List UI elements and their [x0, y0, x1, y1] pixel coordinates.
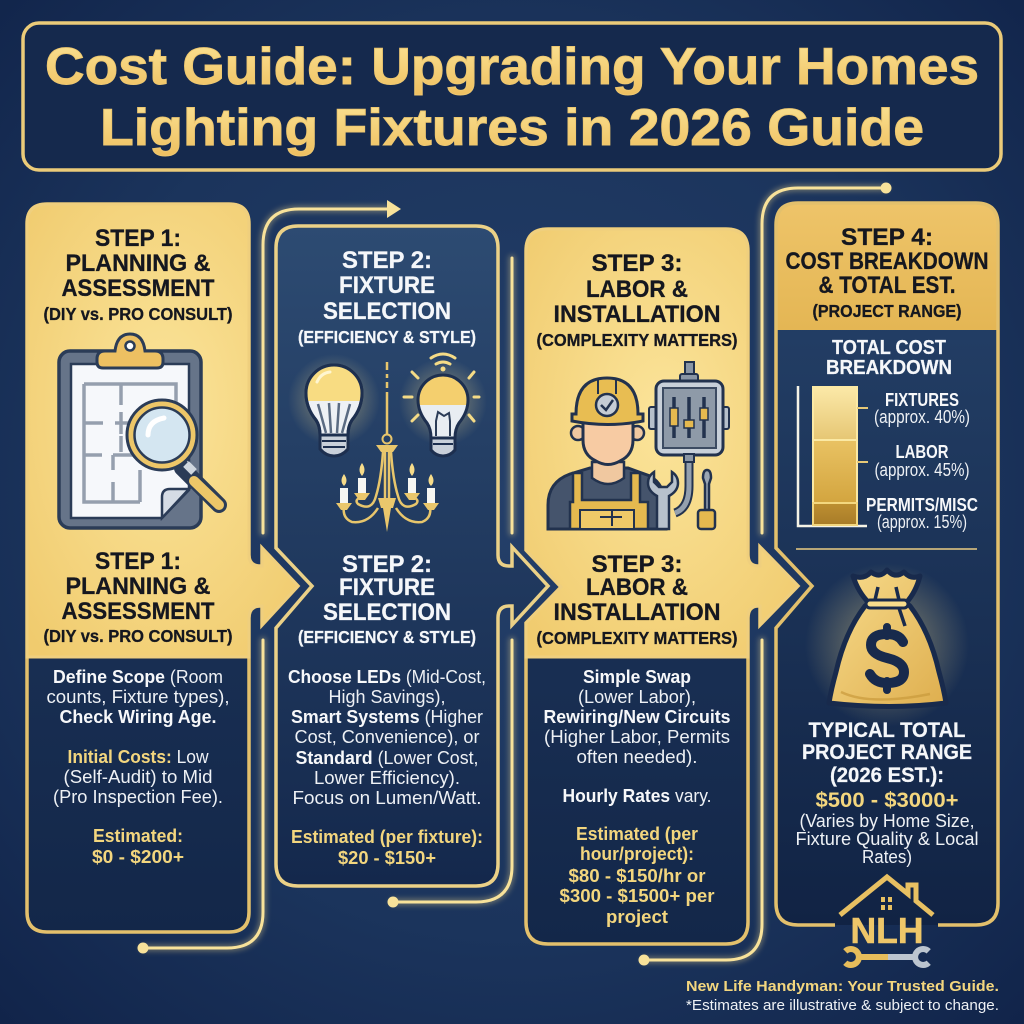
footer: credit and disclaimer: New Life Handyman: Your Trusted Guide.: [686, 978, 999, 995]
icon: electrician with junction box and tools: [548, 362, 729, 529]
panel: step 2 fixture selection: STEP 2:: [342, 247, 432, 274]
text block: step 1 details: $0 - $200+: [92, 847, 184, 867]
panel: step 4 cost breakdown and total: STEP 4:: [841, 224, 933, 251]
text block: step 1 details: Define Scope (Room: [53, 667, 223, 687]
panel: step 2 fixture selection: (EFFICIENCY & STYLE): [298, 627, 476, 647]
text block: step 1 details: [46, 667, 230, 867]
icon: smart bulb with signal: [399, 354, 487, 456]
text block: step 3 details: $80 - $150/hr or: [568, 866, 706, 886]
panel: step 1 planning and assessment: PLANNING &: [66, 573, 210, 600]
chart: stacked cost bar: (approx. 45%): [874, 460, 970, 480]
logo: NLH house and wrench: [840, 877, 933, 965]
text block: step 1 details: Check Wiring Age.: [60, 707, 216, 727]
text block: step 2 details: Standard (Lower Cost,: [296, 748, 478, 768]
text block: step 3 details: [544, 667, 730, 927]
panel: step 1 planning and assessment: ASSESSMENT: [62, 598, 215, 625]
text block: typical total project range: $500 - $3000+: [816, 789, 958, 812]
chart: stacked cost bar: FIXTURES: [885, 390, 959, 410]
text block: step 2 details: Estimated (per fixture):: [291, 827, 483, 847]
panel: step 4 cost breakdown and total: (PROJECT RANGE): [812, 301, 962, 321]
footer: credit and disclaimer: *Estimates are illustrative & subject to change.: [686, 997, 999, 1014]
text block: step 2 details: Lower Efficiency).: [314, 768, 460, 788]
chart: stacked cost bar: [798, 386, 978, 532]
panel: step 3 labor and installation: INSTALLATION: [554, 599, 720, 626]
text block: step 1 details: Estimated:: [93, 826, 183, 846]
text block: step 2 details: Smart Systems (Higher: [291, 707, 483, 727]
heading: total cost breakdown: BREAKDOWN: [826, 357, 952, 379]
text block: step 1 details: (Pro Inspection Fee).: [53, 787, 223, 807]
title banner: Cost Guide: Upgrading Your Homes: [45, 38, 979, 96]
title banner: [23, 23, 1001, 170]
text block: step 1 details: counts, Fixture types),: [46, 687, 230, 707]
panel: step 1 planning and assessment: STEP 1:: [95, 225, 181, 252]
panel: step 4 cost breakdown and total: & TOTAL EST.: [818, 272, 956, 299]
text block: typical total project range: (2026 EST.):: [830, 764, 944, 787]
panel: step 3 labor and installation: (COMPLEXITY MATTERS): [536, 330, 738, 350]
panel: step 2 fixture selection: [276, 226, 548, 886]
panel: step 2 fixture selection: SELECTION: [323, 298, 451, 325]
text block: step 2 details: Cost, Convenience), or: [294, 727, 480, 747]
text block: typical total project range: (Varies by Home Size,: [800, 811, 974, 831]
text block: step 1 details: Initial Costs: Low: [68, 747, 209, 767]
text block: step 3 details: project: [606, 907, 668, 927]
chart: stacked cost bar: PERMITS/MISC: [866, 495, 978, 515]
panel: step 2 fixture selection: (EFFICIENCY & STYLE): [298, 327, 476, 347]
panel: step 2 fixture selection: FIXTURE: [339, 272, 435, 299]
panel: step 3 labor and installation: (COMPLEXITY MATTERS): [536, 628, 738, 648]
logo: NLH house and wrench: NLH: [850, 910, 924, 951]
panel: step 4 cost breakdown and total: COST BREAKDOWN: [786, 248, 988, 275]
connector lines with glow: [138, 182, 892, 966]
text block: step 2 details: Choose LEDs (Mid-Cost,: [288, 667, 486, 687]
text block: typical total project range: Rates): [862, 847, 912, 867]
text block: step 3 details: $300 - $1500+ per: [560, 886, 714, 906]
panel: step 2 fixture selection: SELECTION: [323, 599, 451, 626]
text block: typical total project range: PROJECT RANGE: [802, 741, 972, 764]
panel: step 1 planning and assessment: PLANNING &: [66, 250, 210, 277]
panel: step 1 planning and assessment: (DIY vs. PRO CONSULT): [44, 304, 232, 324]
text block: typical total project range: Fixture Quality & Local: [796, 829, 978, 849]
text block: step 3 details: hour/project):: [580, 844, 694, 864]
panel: step 1 planning and assessment: [27, 204, 298, 932]
panel: step 2 fixture selection: STEP 2:: [342, 551, 432, 578]
heading: total cost breakdown: TOTAL COST: [832, 337, 946, 359]
panel: step 3 labor and installation: STEP 3:: [592, 250, 682, 277]
icon: money bag: [805, 563, 969, 727]
panel: step 4 cost breakdown and total: [776, 203, 998, 925]
panel: step 1 planning and assessment: ASSESSMENT: [62, 275, 215, 302]
chart: stacked cost bar: (approx. 15%): [877, 512, 967, 532]
text block: step 3 details: Estimated (per: [576, 824, 698, 844]
chart: stacked cost bar: LABOR: [896, 442, 948, 462]
panel: step 1 planning and assessment: STEP 1:: [95, 548, 181, 575]
text block: step 3 details: (Lower Labor),: [578, 687, 696, 707]
text block: typical total project range: TYPICAL TOTAL: [808, 719, 966, 742]
panel: step 3 labor and installation: LABOR &: [586, 574, 688, 601]
text block: step 3 details: Hourly Rates vary.: [562, 786, 712, 806]
text block: step 1 details: (Self-Audit) to Mid: [64, 767, 213, 787]
panel: step 1 planning and assessment: (DIY vs. PRO CONSULT): [44, 626, 232, 646]
chart: stacked cost bar: (approx. 40%): [874, 407, 970, 427]
footer: credit and disclaimer: [686, 978, 999, 1014]
icon: chandelier: [336, 362, 439, 532]
text block: step 3 details: (Higher Labor, Permits: [544, 727, 730, 747]
icon: clipboard with floor plan and magnifier: [59, 334, 219, 528]
text block: typical total project range: [796, 719, 978, 867]
text block: step 2 details: High Savings),: [328, 687, 446, 707]
panel: step 2 fixture selection: FIXTURE: [339, 574, 435, 601]
panel: step 3 labor and installation: INSTALLATION: [554, 301, 720, 328]
text block: step 2 details: $20 - $150+: [338, 848, 436, 868]
text block: step 3 details: Rewiring/New Circuits: [544, 707, 730, 727]
panel: step 3 labor and installation: STEP 3:: [592, 551, 682, 578]
title banner: Lighting Fixtures in 2026 Guide: [100, 99, 924, 157]
icon: LED bulb: [288, 354, 380, 456]
panel: step 3 labor and installation: LABOR &: [586, 276, 688, 303]
text block: step 2 details: Focus on Lumen/Watt.: [292, 788, 482, 808]
text block: step 3 details: Simple Swap: [583, 667, 691, 687]
text block: step 2 details: [288, 667, 486, 868]
panel: step 3 labor and installation: [526, 229, 798, 944]
text block: step 3 details: often needed).: [576, 747, 698, 767]
heading: total cost breakdown: [826, 337, 952, 379]
